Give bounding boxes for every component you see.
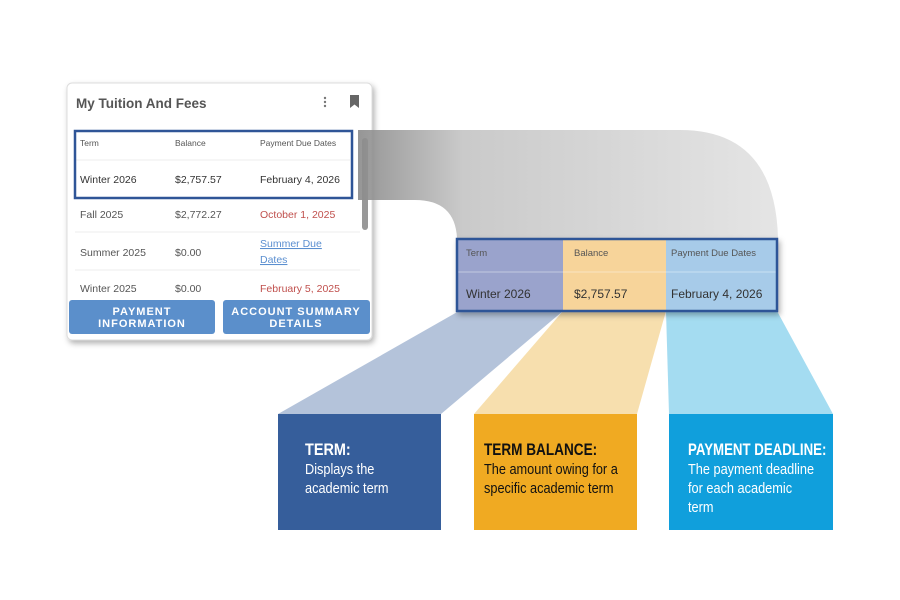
table rows: Winter 2026 (80, 174, 137, 186)
zoomed table: Payment Due Dates (671, 248, 756, 259)
button: payment information (69, 300, 215, 334)
table rows: $0.00 (175, 283, 201, 295)
box: payment deadline: for each academic (688, 479, 792, 496)
table rows: February 5, 2025 (260, 283, 340, 295)
zoomed table: Balance (574, 248, 608, 259)
zoomed table: Winter 2026 (466, 287, 531, 301)
table rows: Summer Due (260, 238, 322, 250)
box: term balance: The amount owing for a (484, 460, 618, 477)
button: account summary details: DETAILS (269, 318, 323, 330)
zoomed table (457, 239, 777, 311)
table rows: Payment Due Dates (260, 138, 336, 148)
box: payment deadline: The payment deadline (688, 460, 814, 477)
zoomed table: February 4, 2026 (671, 287, 763, 301)
card title: My Tuition And Fees (76, 96, 206, 111)
box: term (278, 414, 441, 530)
box: term balance: TERM BALANCE: (484, 441, 597, 459)
scrollbar (362, 138, 368, 230)
box: payment deadline: PAYMENT DEADLINE: (688, 441, 826, 459)
funnel: balance (474, 311, 666, 414)
table rows: Fall 2025 (80, 209, 123, 221)
table rows: $0.00 (175, 247, 201, 259)
button: payment information: INFORMATION (98, 318, 186, 330)
box: term: academic term (305, 479, 389, 496)
connector: gray zoom band (358, 130, 778, 238)
funnel: term (278, 311, 563, 414)
table rows: Dates (260, 254, 287, 266)
button: payment information: PAYMENT (113, 306, 171, 318)
button: account summary details (223, 300, 370, 334)
box: payment deadline (669, 414, 833, 530)
zoomed table: $2,757.57 (574, 287, 628, 301)
box: term balance: specific academic term (484, 479, 614, 496)
highlight box (75, 131, 352, 198)
box: term: TERM: (305, 441, 351, 459)
table rows: Balance (175, 138, 206, 148)
table rows: $2,757.57 (175, 174, 222, 186)
table rows: October 1, 2025 (260, 209, 335, 221)
table rows: February 4, 2026 (260, 174, 340, 186)
table rows (75, 138, 360, 295)
funnel: payment (666, 311, 833, 414)
icon: bookmark (350, 95, 359, 108)
table rows: Term (80, 138, 99, 148)
icon: menu dots (324, 97, 326, 107)
table rows: Winter 2025 (80, 283, 137, 295)
box: term: Displays the (305, 460, 375, 477)
table rows: $2,772.27 (175, 209, 222, 221)
zoomed table: Term (466, 248, 487, 259)
box: term balance (474, 414, 637, 530)
table rows: Summer 2025 (80, 247, 146, 259)
card: my tuition and fees (67, 83, 372, 340)
button: account summary details: ACCOUNT SUMMARY (231, 306, 361, 318)
box: payment deadline: term (688, 498, 713, 515)
